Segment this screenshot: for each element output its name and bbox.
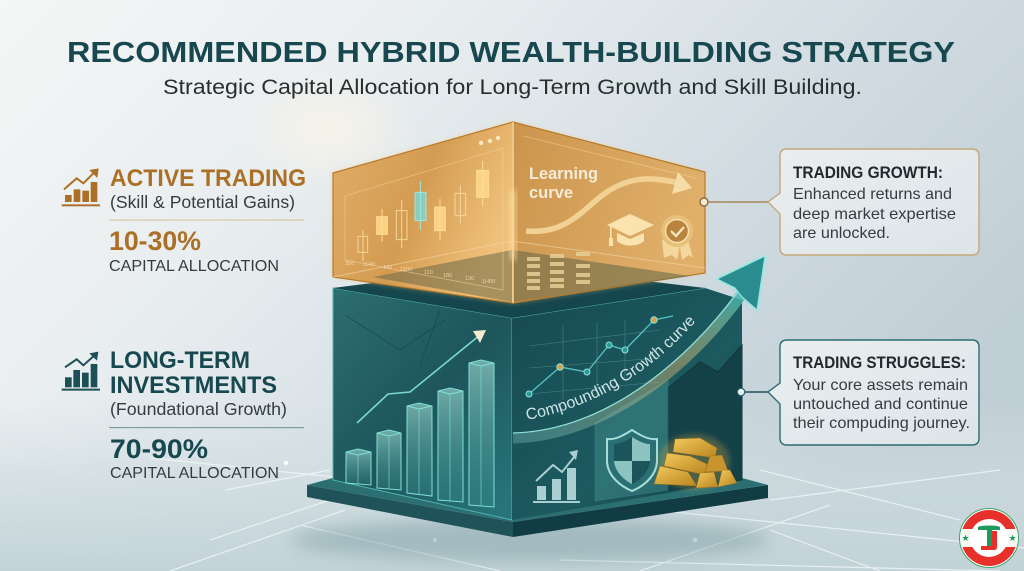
logo badge: ★ — [962, 534, 970, 544]
left face — [333, 122, 513, 303]
icon: gold bars — [654, 434, 737, 490]
heading: long-term investments: LONG-TERM — [110, 347, 250, 374]
title: RECOMMENDED HYBRID WEALTH-BUILDING STRATEGY — [67, 37, 955, 69]
window dots — [479, 136, 500, 145]
chart axis labels — [345, 261, 495, 285]
subtitle: Strategic Capital Allocation for Long-Term Growth and Skill Building. — [163, 76, 862, 99]
icon: amber growth chart — [62, 168, 100, 206]
callout: trading struggles: untouched and continue — [793, 396, 968, 413]
left face — [333, 288, 512, 520]
heading: long-term investments — [110, 347, 277, 399]
data rows — [527, 252, 590, 290]
description: skill and potential gains: (Skill & Potential Gains) — [110, 192, 295, 212]
panel: long-term investments — [62, 347, 304, 482]
line chart — [526, 316, 673, 400]
logo badge: ★ — [1008, 534, 1017, 544]
label: compounding growth curve: Compounding Growth curve — [526, 318, 694, 419]
label: learning curve — [529, 165, 598, 202]
callout: trading struggles: Your core assets remain — [793, 377, 968, 394]
arrow: learning curve — [526, 172, 692, 231]
chart axis labels: 1040 — [363, 262, 375, 268]
chart axis labels: 350 — [345, 261, 354, 267]
callout: trading growth — [700, 149, 979, 255]
callout: trading growth: are unlocked. — [793, 225, 890, 242]
chart axis labels: 110 — [424, 270, 433, 276]
chart axis labels: 130 — [465, 276, 474, 282]
glass amber trading block — [333, 122, 705, 303]
arrow: compounding growth curve — [513, 256, 765, 438]
callout: trading growth: TRADING GROWTH: — [793, 164, 943, 182]
callout: trading struggles: their compuding journey. — [793, 415, 970, 432]
stat: 70-90%: 70-90% — [110, 434, 208, 464]
candlestick chart — [358, 161, 489, 261]
icon: shield — [607, 430, 657, 491]
chart axis labels: 180 — [443, 273, 452, 279]
chart axis labels: 1H00 — [482, 279, 495, 285]
panel: active trading — [62, 165, 306, 275]
heading: active trading: ACTIVE TRADING — [110, 165, 306, 192]
callout: trading growth: deep market expertise — [793, 206, 956, 223]
callout: trading struggles — [737, 340, 979, 445]
reflected dark floor — [373, 250, 512, 302]
icon: teal growth chart — [62, 352, 100, 391]
description: foundational growth: (Foundational Growth) — [110, 399, 287, 419]
label: learning curve: curve — [529, 184, 573, 202]
base plinth — [290, 478, 770, 562]
teal foundation block — [333, 265, 742, 520]
label: learning curve: Learning — [529, 165, 598, 183]
right face — [513, 122, 705, 303]
lower glass panels — [595, 380, 668, 501]
chart axis labels: 1500 — [400, 267, 412, 273]
bar chart: growing glass bars — [346, 360, 494, 507]
callout: trading growth: Enhanced returns and — [793, 186, 952, 203]
callout: trading struggles: TRADING STRUGGLES: — [793, 354, 966, 372]
label: capital allocation: CAPITAL ALLOCATION — [109, 258, 279, 275]
arrow: left face trend line — [357, 330, 486, 423]
icon: small chart — [533, 450, 580, 503]
right face — [512, 288, 742, 520]
chart axis labels: 140 — [383, 265, 392, 271]
label: capital allocation: CAPITAL ALLOCATION — [110, 465, 279, 482]
logo badge — [960, 508, 1018, 568]
heading: long-term investments: INVESTMENTS — [110, 372, 277, 399]
icon: award badge — [661, 215, 693, 260]
icon: graduation cap — [607, 214, 654, 246]
stat: 10-30%: 10-30% — [109, 226, 201, 256]
